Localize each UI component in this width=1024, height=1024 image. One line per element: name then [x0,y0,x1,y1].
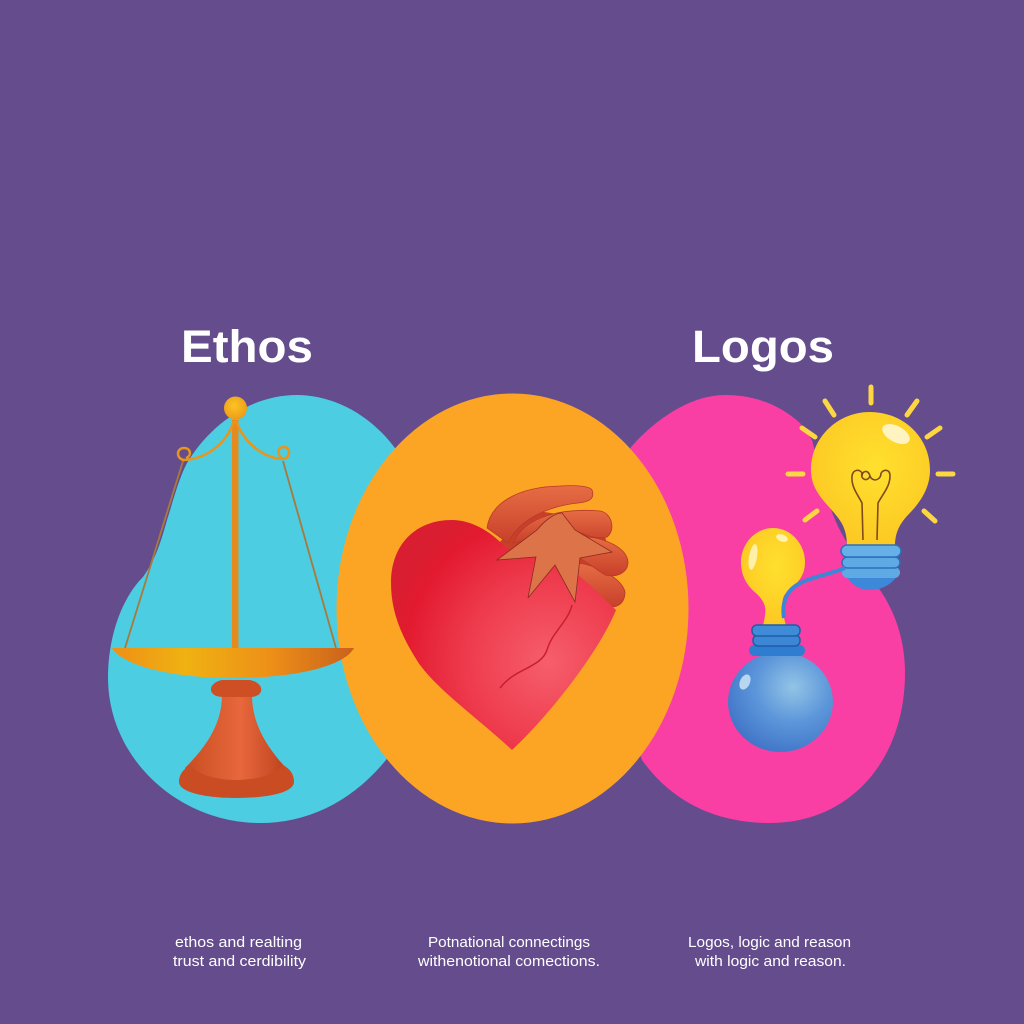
caption: logos [688,935,851,970]
panel: logos pink blob [620,395,905,823]
heart star tear [497,513,612,602]
caption: ethos: trust and cerdibility [173,954,307,970]
screw band 1 [841,545,901,557]
base cone [846,576,897,590]
caption: logos: Logos, logic and reason [688,935,851,951]
scale pan [112,648,354,678]
icon: small light bulb on blue ball [728,528,845,752]
heart crack [500,605,572,688]
caption: pathos: withenotional comections. [417,954,600,970]
connecting wire [783,568,845,618]
heart lobe backing [497,510,612,595]
small bulb highlight [747,544,759,570]
bulb screw base [841,545,901,590]
panel: pathos orange oval [336,394,688,824]
scale collar [211,680,261,697]
icon: large light bulb [788,387,953,590]
scale knob [224,396,247,420]
bulb filament [852,470,890,540]
caption: logos: with logic and reason. [694,954,846,970]
caption: pathos [417,935,600,970]
blue ball highlight [737,673,753,691]
heading: Logos: Logos [692,321,834,372]
caption: ethos [173,935,307,970]
panel: ethos blue blob [108,395,420,823]
small bulb screw base [749,625,805,656]
screw band 2 [842,557,900,568]
bulb highlight [879,420,913,448]
icon: balance scale [112,396,354,798]
small band 2 [753,635,800,646]
scale pole [232,420,238,649]
heart lobes [487,486,628,607]
small band 3 [749,645,805,656]
small bulb glass [741,528,805,626]
scale base [179,765,294,798]
caption: pathos: Potnational connectings [428,935,590,951]
bulb glass [811,412,930,546]
scale stand [185,695,286,782]
scale arms [178,421,289,460]
small bulb spark [775,533,789,543]
bulb rays [788,387,953,521]
screw band 3 [842,567,900,578]
blue ball [728,652,833,752]
scale strings [125,461,336,648]
caption: ethos: ethos and realting [175,935,302,951]
heart body [391,520,616,750]
small band 1 [752,625,800,636]
heading: Ethos: Ethos [181,321,313,372]
icon: heart [391,486,628,750]
